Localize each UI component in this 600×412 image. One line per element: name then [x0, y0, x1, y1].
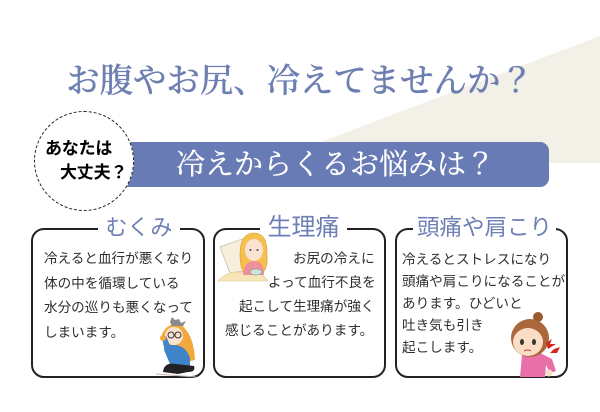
dashed circle badge: [34, 111, 134, 211]
text: seiritsu line 4: 感じることがあります。: [225, 323, 373, 338]
text: seiritsu line 1: お尻の冷えに: [293, 251, 375, 266]
text: zutsu line 2: 頭痛や肩こりになることが: [402, 274, 565, 289]
text: zutsu line 4: 吐き気も引き: [402, 318, 484, 333]
title: お腹やお尻、冷えてませんか？: [66, 63, 534, 100]
icon: seated woman with cat: [156, 317, 196, 378]
text: mukumi line 1: 冷えると血行が悪くなり: [44, 251, 193, 266]
panel: seiritsu: [213, 228, 386, 378]
text: mukumi line 3: 水分の巡りも悪くなって: [44, 300, 193, 315]
heading: seiritsu: 生理痛: [268, 214, 340, 241]
heading: mukumi: [98, 213, 180, 243]
text: zutsu line 1: 冷えるとストレスになり: [402, 252, 551, 267]
badge text line 1: あなたは: [45, 139, 112, 158]
heading: mukumi: むくみ: [106, 215, 172, 240]
text: mukumi line 2: 体の中を循環している: [44, 276, 180, 291]
text: seiritsu line 3: 起こして生理痛が強く: [239, 299, 375, 314]
icon: woman with sore shoulder: [511, 312, 560, 377]
badge text line 2: 大丈夫？: [60, 163, 127, 182]
text: mukumi line 4: しまいます。: [44, 325, 124, 340]
panel: mukumi: [31, 228, 205, 378]
heading: zutsu katakori: 頭痛や肩こり: [417, 215, 552, 240]
panel: zutsu katakori: [395, 228, 568, 378]
banner: [115, 142, 549, 187]
text: seiritsu line 2: よって血行不良を: [268, 275, 376, 290]
text: zutsu line 3: あります。ひどいと: [402, 296, 523, 311]
icon: woman in bed: [217, 232, 268, 282]
banner heading: 冷えからくるお悩みは？: [176, 149, 495, 181]
text: zutsu line 5: 起こします。: [402, 340, 482, 355]
